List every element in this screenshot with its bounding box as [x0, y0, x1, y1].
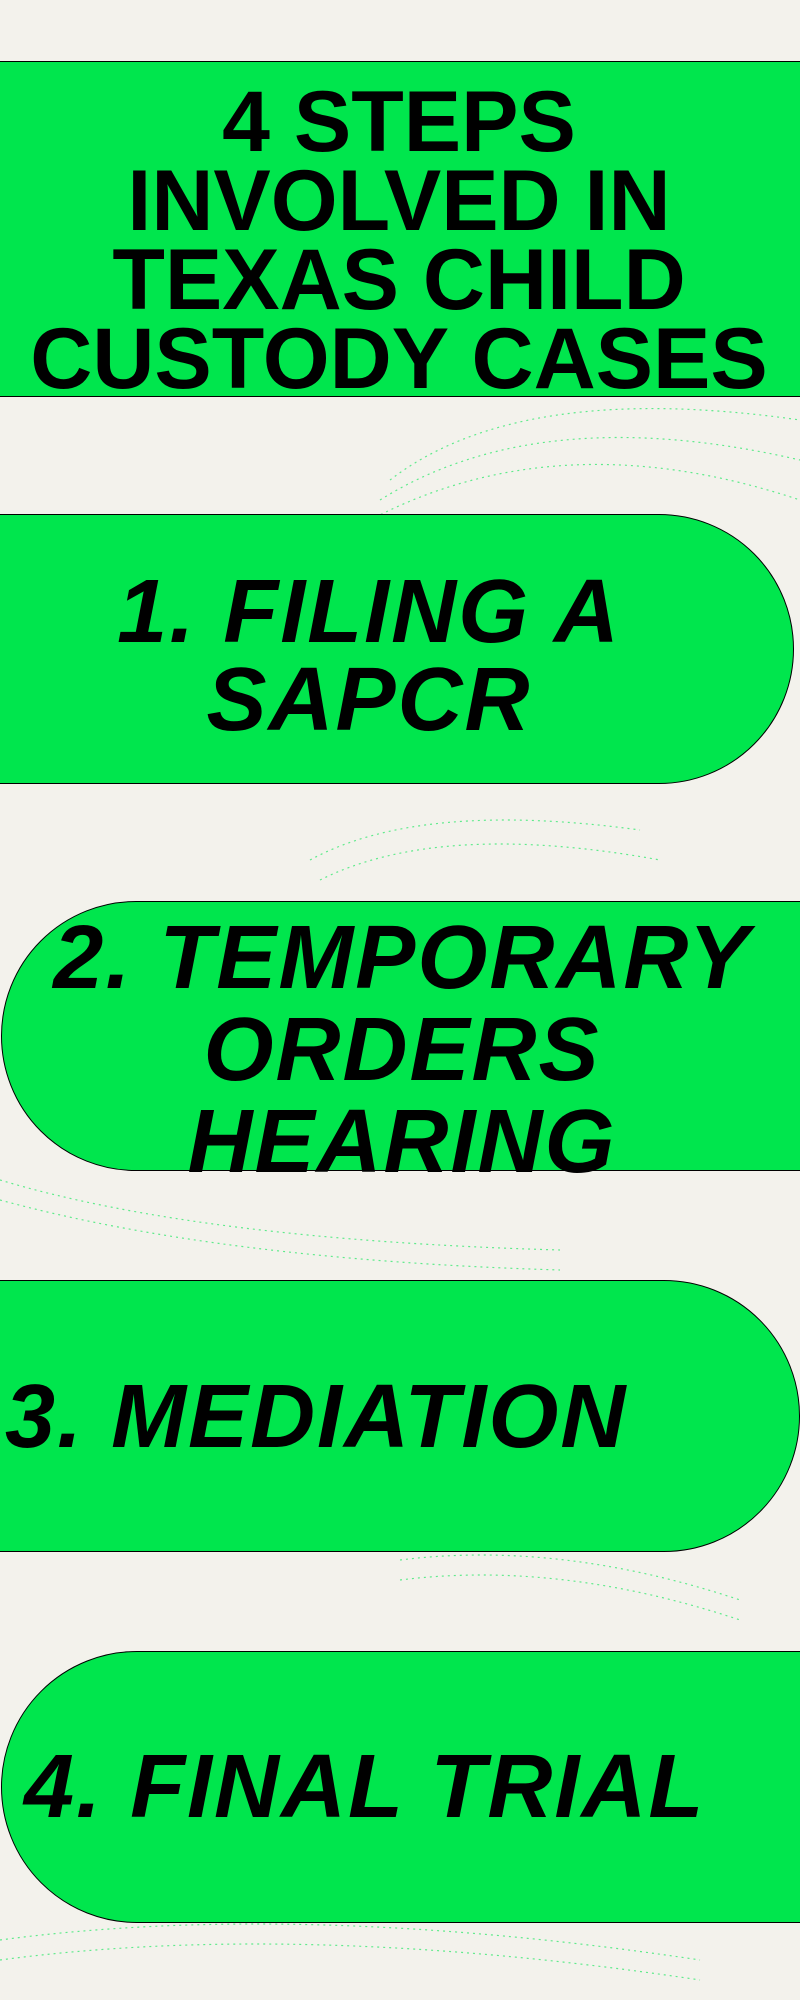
title: 4 STEPS	[222, 74, 576, 170]
step 1 pill	[0, 514, 794, 784]
step 2 text: 2. TEMPORARY	[53, 908, 751, 1008]
step 3 text: 3. MEDIATION	[5, 1367, 627, 1467]
title: CUSTODY CASES	[30, 311, 768, 407]
step 3 pill	[0, 1280, 800, 1552]
step 4 pill	[1, 1651, 800, 1923]
step 1 text	[117, 562, 621, 750]
step 1 text: 1. FILING A	[117, 562, 621, 662]
step 4 text: 4. FINAL TRIAL	[24, 1737, 705, 1837]
step 2 text: HEARING	[187, 1092, 617, 1192]
step 2 text: ORDERS	[203, 1000, 601, 1100]
step 2 pill	[1, 901, 800, 1171]
step 1 text: SAPCR	[206, 650, 532, 750]
title: TEXAS CHILD	[112, 232, 686, 328]
title	[30, 74, 768, 407]
title: INVOLVED IN	[127, 153, 671, 249]
step 2 text	[52, 908, 756, 1192]
title panel	[0, 61, 800, 397]
